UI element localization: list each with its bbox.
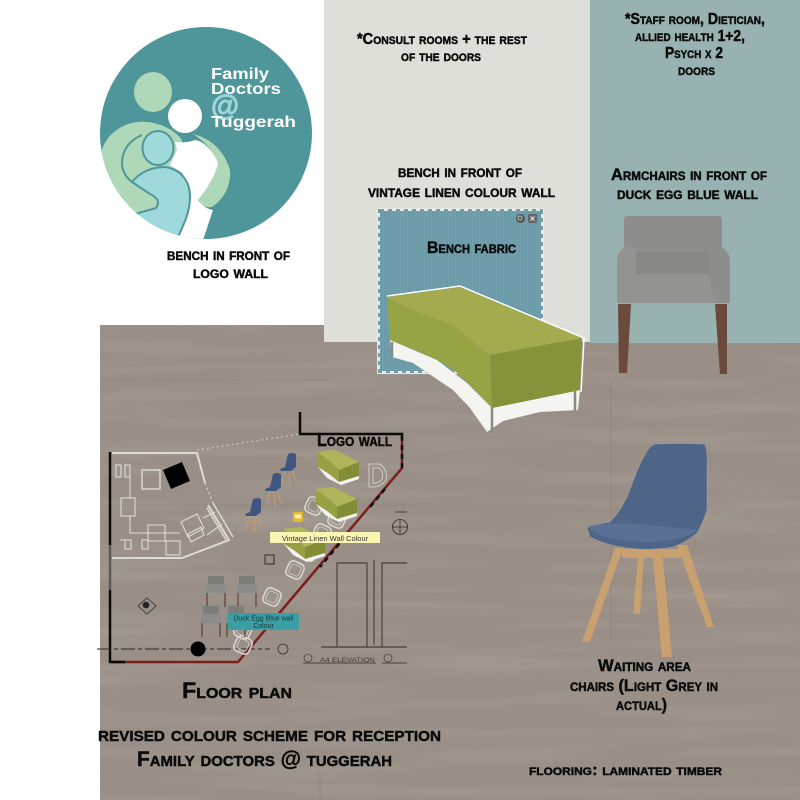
logo wordmark: @ (211, 90, 239, 122)
caption: waiting area chairs: chairs (Light Grey in (570, 676, 718, 695)
swatch: bench fabric (377, 208, 544, 374)
floor plan label: duck egg blue wall colour (228, 613, 299, 630)
caption: bench in front of logo wall (167, 246, 290, 282)
note: consult rooms doors (357, 31, 527, 65)
furniture: grey armchair (617, 216, 730, 374)
furniture: blue waiting area chair (582, 444, 714, 657)
note: staff room doors: allied health 1+2, (635, 28, 745, 45)
floor plan: yellow note icon (293, 512, 303, 522)
title: revised colour scheme: revised colour scheme for reception (98, 723, 441, 746)
floor plan label: logo wall: Logo wall (317, 430, 392, 450)
caption: armchairs in front of duck egg blue wall: duck egg blue wall (617, 184, 758, 203)
floor plan: elevation drawing (303, 560, 407, 664)
floor plan: small symbols (138, 512, 408, 614)
icon: swatch zoom and close buttons (516, 214, 537, 223)
logo: Family Doctors @ Tuggerah: Tuggerah (211, 114, 296, 131)
logo: Family Doctors @ Tuggerah: Doctors (211, 81, 281, 98)
armchair back (624, 216, 722, 285)
armchair legs (618, 304, 727, 374)
floor plan: mini armchairs (201, 576, 257, 637)
caption: bench in front of vintage linen wall: vintage linen colour wall (368, 182, 555, 201)
caption: bench in front of logo wall: logo wall (193, 264, 268, 282)
logo figure: adult white (168, 99, 218, 240)
white cut-out under bench (390, 340, 580, 432)
floor plan: mini benches (283, 450, 359, 562)
logo figure: adult green (100, 72, 230, 216)
panel: duck egg blue wall colour (590, 0, 800, 343)
caption: waiting area chairs: actual) (616, 695, 667, 714)
panel: vintage linen wall colour (324, 0, 590, 342)
chair wooden legs (582, 545, 714, 657)
logo: Family Doctors @ Tuggerah: Family (211, 66, 269, 83)
bench side (387, 297, 492, 408)
note: staff room doors: *Staff room, Dietician, (625, 11, 765, 28)
bench end (490, 338, 582, 408)
bench top (387, 287, 582, 355)
floor plan: red and black perimeter walls (110, 412, 402, 662)
floor plan: mini waiting chairs (245, 453, 297, 532)
armchair seat (630, 274, 717, 303)
caption: waiting area chairs: Waiting area (598, 656, 691, 675)
floor plan (97, 412, 408, 664)
chair shell (587, 444, 707, 549)
logo figure: child blue (132, 131, 190, 237)
floor plan label: vintage linen wall colour: Vintage Linen Wall Colour (282, 534, 369, 543)
floor plan: elevation drawing: A4 ELEVATION (320, 658, 375, 664)
caption: floor plan: Floor plan (182, 678, 292, 703)
caption: flooring laminated timber: flooring: laminated timber (529, 762, 722, 779)
title: revised colour scheme: Family doctors @ tuggerah (137, 748, 392, 771)
floor plan label: duck egg blue wall colour: Duck Egg Blue wall (233, 616, 294, 622)
floor plan: seat markers (232, 464, 386, 656)
note: staff room doors: Psych x 2 (665, 45, 723, 62)
caption: armchairs in front of duck egg blue wall: Armchairs in front of (611, 165, 767, 184)
floor plan label: duck egg blue wall colour: Colour (253, 623, 274, 630)
bench legs (392, 342, 575, 433)
caption: waiting area chairs (570, 656, 718, 714)
floor plan label: vintage linen wall colour (270, 532, 380, 543)
note: staff room doors (625, 11, 765, 79)
furniture: curved green bench (387, 286, 584, 433)
caption: bench in front of logo wall: bench in front of (167, 246, 290, 264)
note: staff room doors: doors (678, 62, 715, 79)
armchair arms (617, 246, 636, 303)
title: revised colour scheme (98, 723, 441, 771)
note: consult rooms doors: *Consult rooms + the rest (357, 31, 527, 48)
note: consult rooms doors: of the doors (401, 48, 481, 65)
panel: laminated timber floor (100, 325, 800, 800)
floor plan: office outline (112, 434, 300, 558)
chair cushion (588, 523, 697, 542)
logo: Family Doctors @ Tuggerah (100, 27, 312, 240)
floor plan: grid line and black dot (97, 642, 288, 656)
caption: bench in front of vintage linen wall: bench in front of (398, 162, 522, 181)
label: bench fabric: Bench fabric (427, 238, 516, 257)
floor plan: black column square (163, 462, 190, 489)
caption: bench in front of vintage linen wall (368, 162, 555, 201)
caption: armchairs in front of duck egg blue wall (611, 165, 767, 203)
